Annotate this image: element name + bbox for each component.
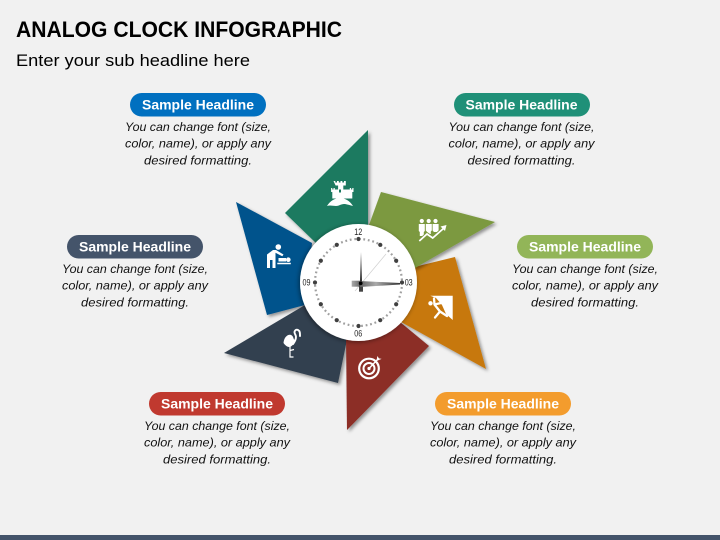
- body text: [512, 262, 659, 310]
- icon: climber: [428, 296, 453, 320]
- body text: desired formatting.: [449, 453, 557, 467]
- body text: You can change font (size,: [144, 419, 290, 433]
- body text: color, name), or apply any: [144, 436, 291, 450]
- callout: middle left: [62, 235, 209, 310]
- body text: desired formatting.: [531, 296, 639, 310]
- body text: color, name), or apply any: [62, 279, 209, 293]
- body text: color, name), or apply any: [448, 137, 596, 151]
- icon: flamingo: [284, 330, 300, 357]
- icon: team growth: [419, 219, 446, 241]
- callout: middle right: [512, 235, 659, 310]
- panel: orange segment: [401, 257, 486, 369]
- icon: person changing baby: [267, 244, 291, 268]
- headline: Sample Headline: [529, 240, 642, 254]
- body text: You can change font (size,: [448, 120, 594, 134]
- body text: desired formatting.: [144, 154, 252, 168]
- pill: [67, 235, 203, 258]
- pill: [454, 93, 590, 116]
- body text: desired formatting.: [163, 453, 271, 467]
- hour numerals: 03: [405, 278, 413, 288]
- body text: [125, 120, 272, 168]
- body text: desired formatting.: [81, 296, 189, 310]
- panel: green segment: [285, 130, 368, 245]
- body text: [62, 262, 209, 310]
- hour numerals: 12: [354, 227, 362, 238]
- body text: You can change font (size,: [125, 120, 271, 134]
- icon: castle: [327, 181, 354, 206]
- body text: [448, 120, 596, 168]
- panel: olive segment: [369, 192, 495, 268]
- pill: [149, 392, 285, 416]
- hour numerals: 06: [354, 328, 362, 340]
- headline: Sample Headline: [466, 98, 578, 112]
- body text: color, name), or apply any: [430, 436, 577, 450]
- body text: color, name), or apply any: [512, 279, 659, 293]
- callout: top left: [125, 93, 272, 168]
- pill: [130, 93, 266, 116]
- body text: color, name), or apply any: [125, 137, 272, 151]
- body text: You can change font (size,: [430, 419, 576, 433]
- body text: [144, 419, 291, 467]
- callout: top right: [448, 93, 596, 168]
- headline: Sample Headline: [79, 240, 192, 254]
- body text: desired formatting.: [468, 154, 576, 168]
- subtitle: Enter your sub headline here: [16, 51, 250, 70]
- clock face: [300, 224, 417, 341]
- footer bar: [0, 535, 720, 540]
- callout: bottom left: [144, 392, 291, 467]
- headline: Sample Headline: [161, 396, 274, 412]
- body text: You can change font (size,: [62, 262, 208, 276]
- body text: You can change font (size,: [512, 262, 658, 276]
- headline: Sample Headline: [142, 98, 255, 112]
- body text: [430, 419, 577, 467]
- panel: blue segment: [236, 202, 312, 315]
- callout: bottom right: [430, 392, 577, 467]
- hour markers: [313, 237, 404, 328]
- panel: red segment: [346, 322, 429, 430]
- pill: [517, 235, 653, 258]
- hour numerals: [302, 227, 413, 340]
- headline: Sample Headline: [447, 396, 560, 412]
- pill: [435, 392, 571, 416]
- clock: [300, 224, 417, 341]
- clock hands: [352, 252, 400, 292]
- hour numerals: 09: [302, 278, 310, 288]
- minute track dots: [315, 239, 402, 326]
- icon: target: [359, 356, 382, 378]
- panel: navy segment: [224, 305, 348, 383]
- title: ANALOG CLOCK INFOGRAPHIC: [16, 17, 342, 42]
